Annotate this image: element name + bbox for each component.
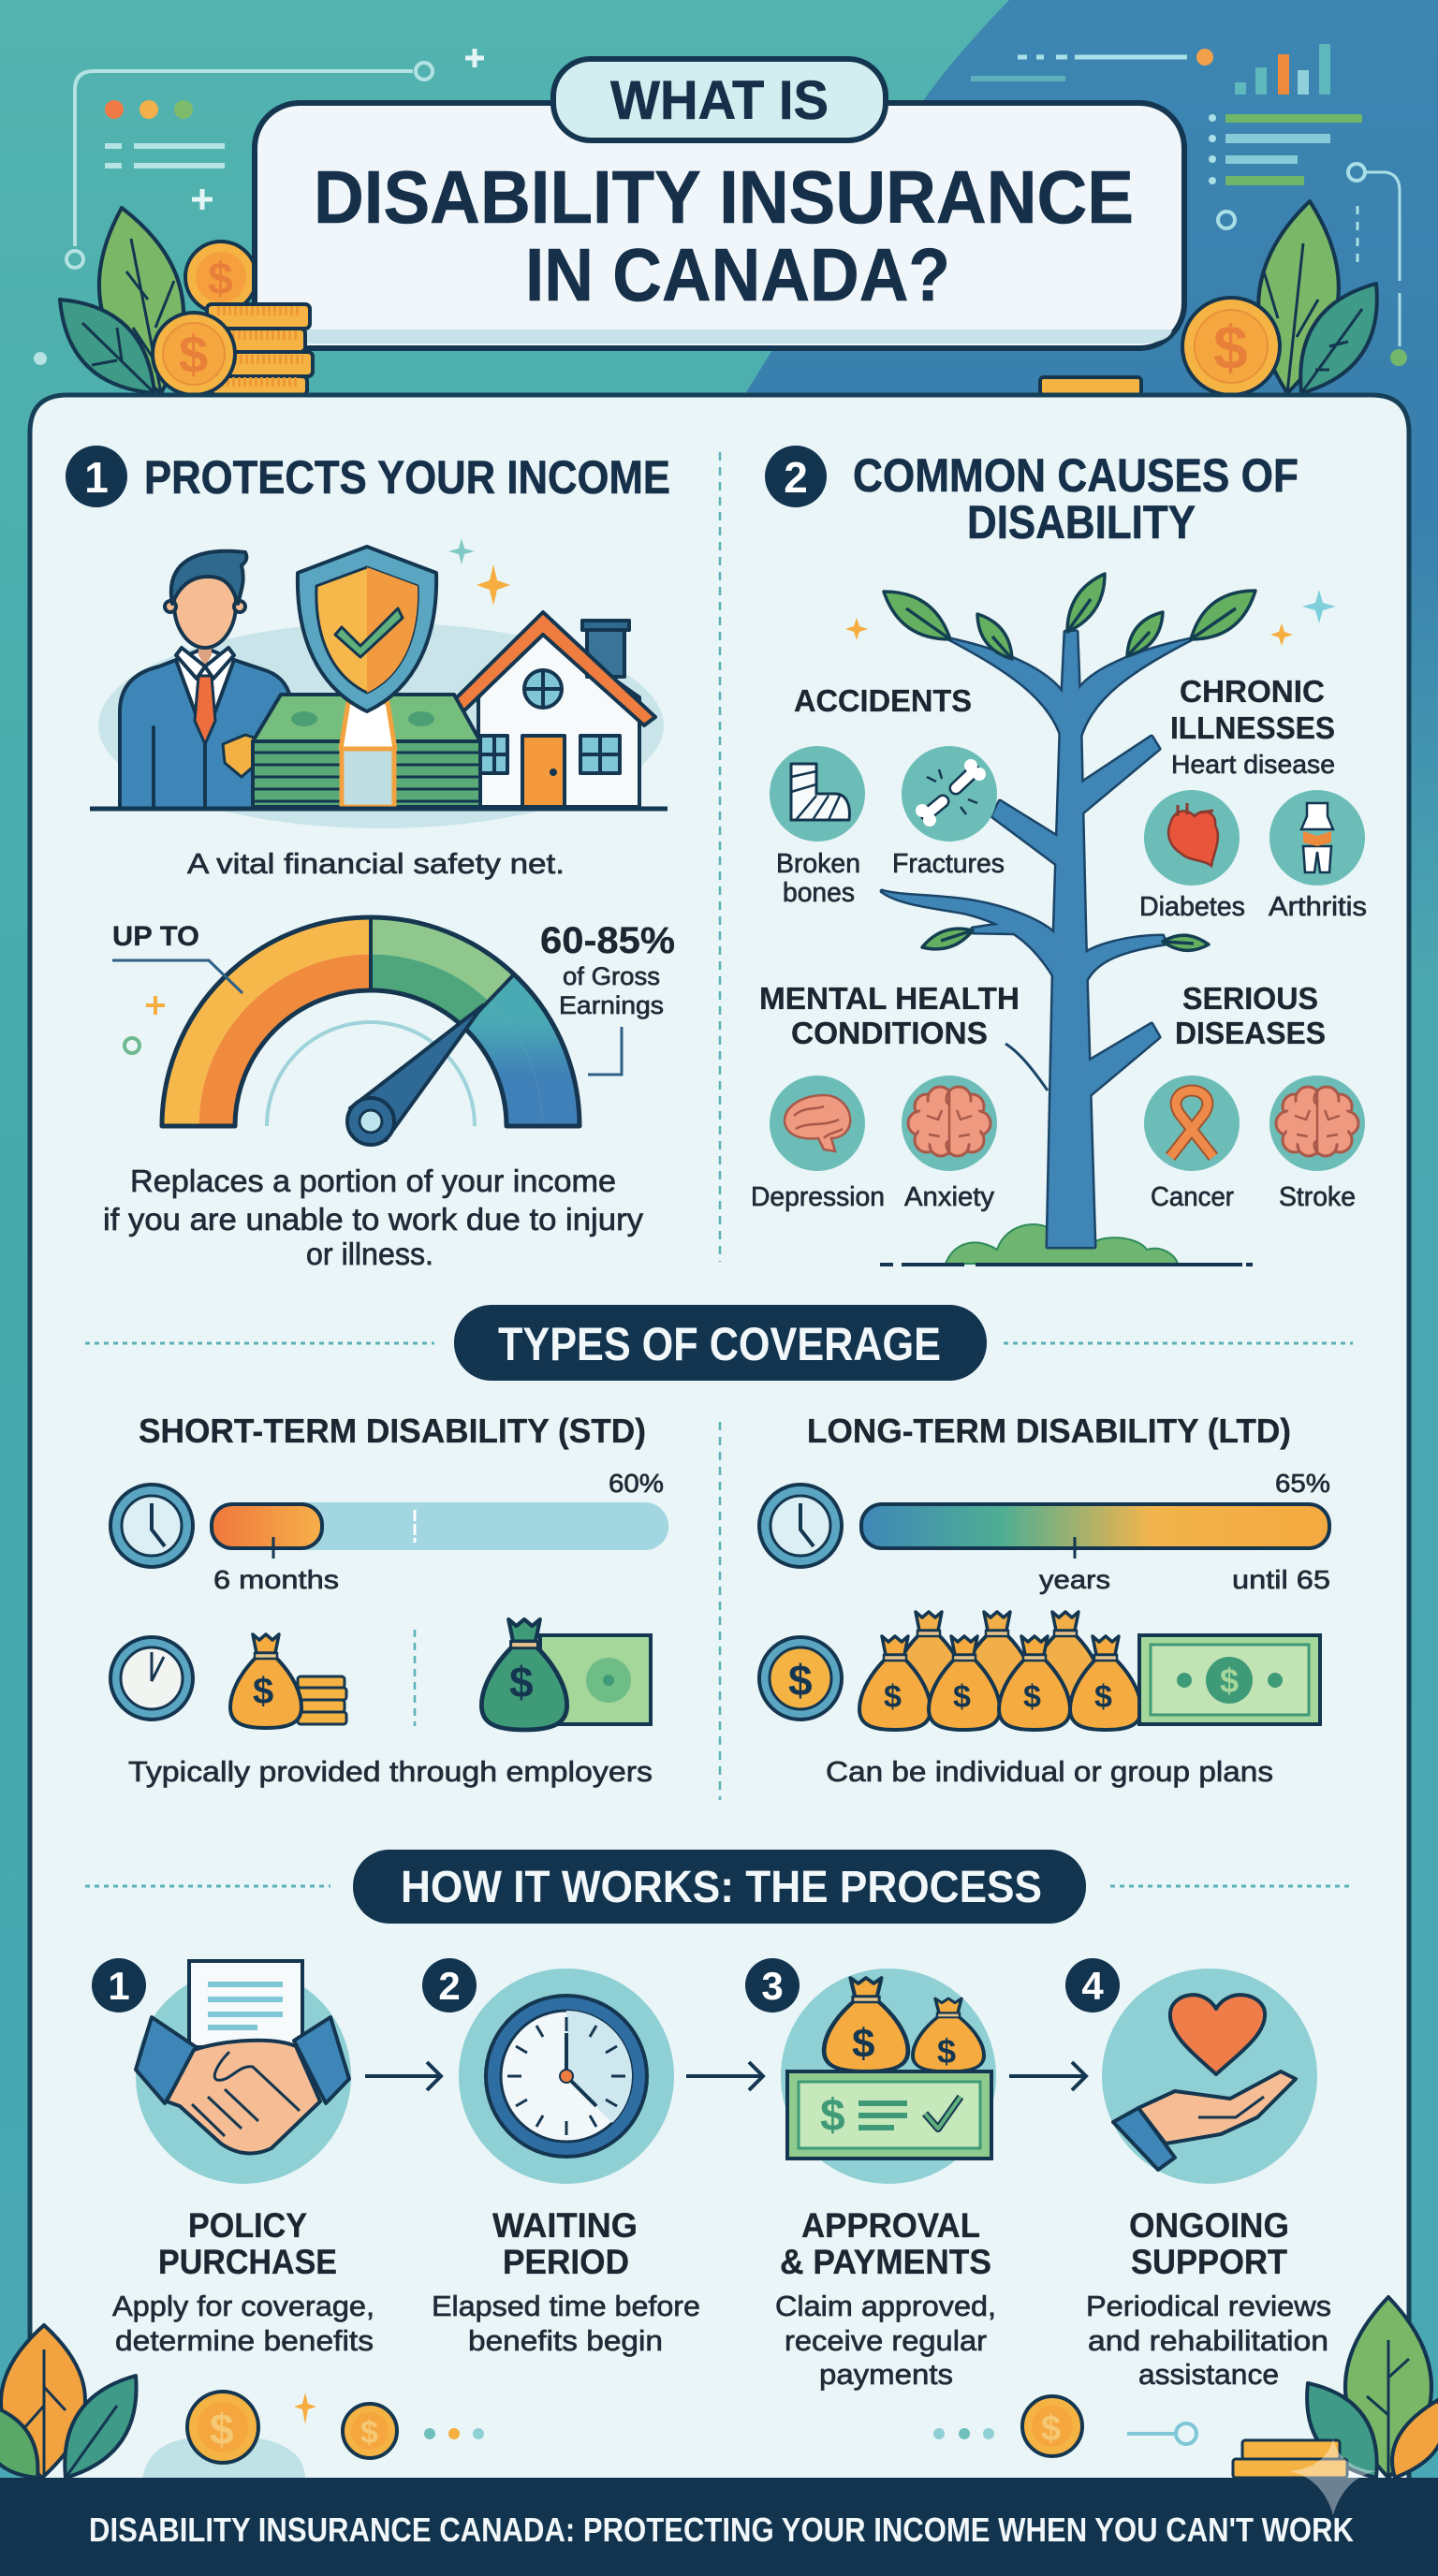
arrow 3 bbox=[1009, 2062, 1086, 2090]
icon: contract and handshake bbox=[136, 1961, 349, 2153]
group: accidents: ACCIDENTS bbox=[794, 683, 972, 718]
title card bbox=[255, 59, 1184, 348]
icon: cast bbox=[770, 746, 865, 842]
step 4: ONGOING bbox=[1129, 2206, 1289, 2245]
left header leaves bbox=[60, 208, 183, 393]
icon: brain side bbox=[770, 1076, 865, 1171]
icon: ribbon bbox=[1144, 1076, 1240, 1171]
step 3: Claim approved, bbox=[775, 2290, 996, 2322]
section: types of coverage bbox=[85, 1305, 1353, 1788]
group: serious diseases: Cancer bbox=[1151, 1182, 1234, 1212]
badge: 4 bbox=[1081, 1964, 1104, 2008]
coin behind title: $ bbox=[208, 255, 233, 304]
badge: 2 bbox=[438, 1964, 461, 2008]
icon: clock plain bbox=[110, 1637, 193, 1720]
step 2: WAITING bbox=[492, 2206, 638, 2245]
short term column bbox=[110, 1412, 668, 1788]
heading 1: PROTECTS YOUR INCOME bbox=[144, 451, 670, 504]
icon: bags and cheque: $ bbox=[852, 2021, 874, 2067]
icon: bags and cheque bbox=[787, 1978, 991, 2159]
sparkles bbox=[845, 590, 1336, 646]
shield bbox=[298, 547, 436, 711]
group: chronic illnesses: Diabetes bbox=[1139, 892, 1245, 922]
icon: coin clock bbox=[759, 1637, 842, 1720]
step 4 bbox=[1065, 1958, 1331, 2391]
coin right bbox=[1182, 298, 1280, 395]
step 1: POLICY bbox=[188, 2206, 307, 2245]
coin stack right bbox=[1233, 2440, 1347, 2478]
group: chronic illnesses: CHRONIC bbox=[1180, 674, 1325, 709]
long term column: 65% bbox=[1275, 1469, 1330, 1498]
group: mental health: CONDITIONS bbox=[791, 1016, 988, 1050]
main title bbox=[314, 155, 1134, 316]
icon: bill bbox=[1139, 1635, 1320, 1724]
top left tech decoration bbox=[34, 49, 484, 365]
group: mental health bbox=[751, 981, 1020, 1212]
banner bbox=[85, 1850, 1354, 1924]
tree bbox=[845, 574, 1336, 1265]
step 1: determine benefits bbox=[115, 2324, 374, 2357]
icon: green bag and bill: $ bbox=[509, 1658, 534, 1706]
step 4: Periodical reviews bbox=[1086, 2290, 1331, 2322]
duration bar bbox=[212, 1502, 668, 1594]
coin right: $ bbox=[1213, 313, 1248, 382]
clock bbox=[759, 1485, 842, 1567]
right header leaves bbox=[1258, 201, 1377, 393]
coin stack left bbox=[207, 304, 313, 395]
icon: bag and coins: $ bbox=[253, 1671, 273, 1712]
caption: safety net: A vital financial safety net. bbox=[187, 847, 565, 880]
duration bar: until 65 bbox=[1232, 1565, 1330, 1594]
step 3: APPROVAL bbox=[801, 2206, 980, 2245]
step 2: benefits begin bbox=[468, 2324, 663, 2357]
group: chronic illnesses: Heart disease bbox=[1171, 750, 1335, 779]
section: how it works bbox=[85, 1850, 1354, 2391]
badge 2: 2 bbox=[784, 453, 808, 502]
group: accidents bbox=[770, 683, 1005, 908]
step 2 bbox=[422, 1958, 700, 2357]
percent label bbox=[540, 920, 675, 1075]
group: mental health: Depression bbox=[751, 1182, 885, 1212]
clock bbox=[110, 1485, 193, 1567]
coin front left bbox=[153, 313, 235, 395]
percent label: Earnings bbox=[559, 991, 664, 1019]
footer bar bbox=[0, 2478, 1438, 2576]
description text: if you are unable to work due to injury bbox=[103, 1202, 644, 1237]
bottom decorations left bbox=[142, 2392, 484, 2478]
icon: money bags: $ bbox=[884, 1679, 902, 1715]
icon: money bags: $ bbox=[1094, 1679, 1112, 1715]
badge: 3 bbox=[761, 1964, 784, 2008]
main title: IN CANADA? bbox=[525, 233, 950, 316]
icon: clock bbox=[486, 1996, 647, 2157]
needle bbox=[347, 1005, 483, 1145]
duration bar: 6 months bbox=[213, 1565, 339, 1594]
group: chronic illnesses: ILLNESSES bbox=[1170, 710, 1335, 745]
group: serious diseases bbox=[1144, 981, 1365, 1212]
badge bbox=[745, 1958, 800, 2012]
ground line bbox=[90, 807, 668, 811]
person bbox=[120, 551, 290, 809]
step 3: payments bbox=[819, 2358, 953, 2391]
step 3: & PAYMENTS bbox=[780, 2243, 991, 2281]
description text: Replaces a portion of your income bbox=[130, 1164, 616, 1198]
duration bar bbox=[861, 1504, 1330, 1594]
group: chronic illnesses: Arthritis bbox=[1269, 892, 1367, 922]
icon: green bag and bill bbox=[481, 1619, 651, 1730]
group: accidents: bones bbox=[783, 878, 855, 908]
bottom leaves left bbox=[0, 2325, 137, 2478]
description text bbox=[103, 1164, 644, 1271]
divider bbox=[719, 452, 721, 1800]
step 3: receive regular bbox=[785, 2324, 987, 2357]
icon: heart in hand bbox=[1113, 1995, 1296, 2170]
section 2: common causes bbox=[751, 446, 1367, 1265]
bottom leaves right bbox=[1307, 2297, 1438, 2478]
group: mental health: Anxiety bbox=[904, 1182, 994, 1212]
money stack bbox=[253, 695, 480, 807]
long term column: LONG-TERM DISABILITY (LTD) bbox=[807, 1412, 1291, 1450]
badge bbox=[92, 1958, 146, 2012]
heading 2: DISABILITY bbox=[967, 496, 1196, 549]
coin front left: $ bbox=[179, 325, 208, 384]
badge bbox=[422, 1958, 477, 2012]
bottom decorations right bbox=[933, 2396, 1196, 2456]
up to label: UP TO bbox=[112, 921, 199, 952]
icon: brain top bbox=[902, 1076, 997, 1171]
step 4: and rehabilitation bbox=[1088, 2324, 1328, 2357]
small coin stack right bbox=[1040, 377, 1141, 395]
group: chronic illnesses bbox=[1139, 674, 1367, 922]
step 3 bbox=[745, 1958, 996, 2391]
description text: or illness. bbox=[306, 1237, 433, 1271]
coin behind title bbox=[185, 242, 257, 313]
banner bbox=[85, 1305, 1353, 1381]
bottom decorations left: $ bbox=[210, 2405, 234, 2453]
badge 1: 1 bbox=[84, 453, 109, 502]
arrow 2 bbox=[686, 2062, 763, 2090]
group: serious diseases: Stroke bbox=[1279, 1182, 1356, 1212]
step 4: SUPPORT bbox=[1131, 2243, 1287, 2281]
icon: money bags: $ bbox=[1023, 1679, 1041, 1715]
group: serious diseases: DISEASES bbox=[1175, 1016, 1326, 1050]
group: mental health: MENTAL HEALTH bbox=[759, 981, 1020, 1016]
icon: knee joint bbox=[1269, 790, 1365, 886]
watermark sparkle bbox=[1289, 2438, 1376, 2515]
heading 2 bbox=[853, 449, 1299, 549]
step 1 bbox=[92, 1958, 374, 2357]
group: accidents: Broken bbox=[776, 849, 860, 879]
bottom decorations right: $ bbox=[1041, 2409, 1061, 2449]
long term column bbox=[759, 1412, 1330, 1788]
short term column: 60% bbox=[609, 1469, 664, 1498]
short term column: SHORT-TERM DISABILITY (STD) bbox=[139, 1412, 646, 1450]
up to label bbox=[112, 921, 242, 993]
step 2: PERIOD bbox=[503, 2243, 629, 2281]
step 4: assistance bbox=[1138, 2358, 1279, 2391]
percent label: 60-85% bbox=[540, 920, 675, 961]
bottom decorations left: $ bbox=[360, 2415, 378, 2451]
house bbox=[454, 612, 655, 807]
sparkles bbox=[448, 538, 510, 606]
arrow 1 bbox=[365, 2062, 441, 2090]
step 1: Apply for coverage, bbox=[112, 2290, 374, 2322]
banner: HOW IT WORKS: THE PROCESS bbox=[401, 1863, 1042, 1912]
section 1: protects your income bbox=[66, 446, 675, 1271]
duration bar: years bbox=[1039, 1565, 1110, 1594]
badge: 1 bbox=[108, 1964, 130, 2008]
step 2: Elapsed time before bbox=[432, 2290, 700, 2322]
banner: TYPES OF COVERAGE bbox=[498, 1318, 941, 1370]
step 1: PURCHASE bbox=[158, 2243, 337, 2281]
title pill: WHAT IS bbox=[610, 70, 829, 131]
short term column: Typically provided through employers bbox=[128, 1755, 653, 1788]
badge 1 bbox=[66, 446, 127, 507]
heading 2: COMMON CAUSES OF bbox=[853, 449, 1299, 502]
gauge chart bbox=[112, 917, 675, 1145]
badge bbox=[1065, 1958, 1120, 2012]
group: serious diseases: SERIOUS bbox=[1182, 981, 1318, 1016]
leaves bbox=[884, 574, 1255, 950]
icon: coin clock: $ bbox=[788, 1656, 813, 1705]
icon: brain stroke bbox=[1269, 1076, 1365, 1171]
top right tech decoration bbox=[971, 44, 1407, 366]
group: accidents: Fractures bbox=[892, 849, 1005, 879]
badge 2 bbox=[765, 446, 827, 507]
illustration: person, shield, money, house bbox=[90, 538, 668, 828]
long term column: Can be individual or group plans bbox=[826, 1755, 1273, 1788]
icon: fractured bone bbox=[902, 746, 997, 842]
icon: bill: $ bbox=[1220, 1661, 1239, 1700]
icon: bags and cheque: $ bbox=[820, 2091, 845, 2141]
icon: money bags bbox=[859, 1612, 1141, 1730]
icon: money bags: $ bbox=[953, 1679, 971, 1715]
percent label: of Gross bbox=[563, 962, 660, 990]
title pill bbox=[553, 59, 886, 140]
icon: heart bbox=[1144, 790, 1240, 886]
main title: DISABILITY INSURANCE bbox=[314, 155, 1134, 239]
icon: bags and cheque: $ bbox=[937, 2032, 956, 2071]
icon: bag and coins bbox=[230, 1634, 346, 1728]
